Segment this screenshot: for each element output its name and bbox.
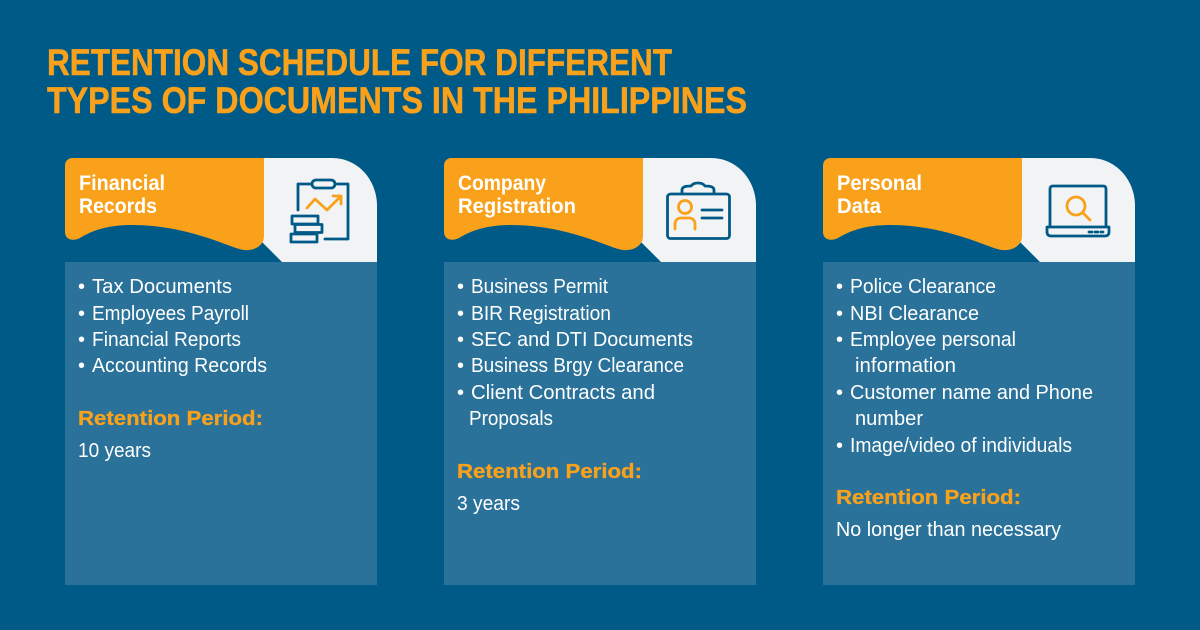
document list: BIR Registration [471, 303, 611, 325]
document list: SEC and DTI Documents [471, 329, 693, 351]
document list: • [78, 276, 85, 298]
retention period: Retention Period: [457, 461, 642, 483]
document list: Customer name and Phone [850, 382, 1093, 404]
document list: • [457, 382, 464, 404]
heading [458, 172, 576, 218]
document list: Proposals [469, 408, 553, 430]
title: RETENTION SCHEDULE FOR DIFFERENT [47, 42, 672, 83]
document list: • [78, 303, 85, 325]
header orange banner [444, 158, 643, 250]
document list: Accounting Records [92, 355, 267, 377]
document list: • [457, 276, 464, 298]
heading: Registration [458, 195, 576, 218]
document list: • [836, 382, 843, 404]
document list: • [836, 435, 843, 457]
document list: Employees Payroll [92, 303, 249, 325]
header light tab [1008, 158, 1135, 262]
panel body [444, 262, 756, 585]
document list: • [836, 303, 843, 325]
heading: Personal [837, 172, 922, 195]
retention period [457, 461, 642, 515]
panel: financial records [65, 158, 377, 585]
heading [79, 172, 165, 218]
header orange banner [65, 158, 264, 250]
document list: information [855, 355, 956, 377]
heading: Company [458, 172, 546, 195]
document list: • [457, 303, 464, 325]
retention period: Retention Period: [78, 408, 263, 430]
document list: Business Brgy Clearance [471, 355, 684, 377]
retention period [78, 408, 263, 462]
retention period [836, 487, 1061, 541]
heading [837, 172, 922, 218]
title [47, 42, 747, 121]
document list: NBI Clearance [850, 303, 979, 325]
retention period: No longer than necessary [836, 519, 1061, 541]
document list: number [855, 408, 923, 430]
panel body [823, 262, 1135, 585]
document list: • [78, 355, 85, 377]
document list: Employee personal [850, 329, 1016, 351]
title: TYPES OF DOCUMENTS IN THE PHILIPPINES [47, 80, 747, 121]
document list: Financial Reports [92, 329, 241, 351]
document list [836, 276, 1093, 457]
panel body [65, 262, 377, 585]
document list: • [457, 355, 464, 377]
icon: clipboard with chart and stacked books [291, 180, 348, 242]
icon: id badge [668, 183, 730, 238]
panel: personal data [823, 158, 1135, 585]
document list: • [78, 329, 85, 351]
header light tab [629, 158, 756, 262]
document list: Tax Documents [92, 276, 232, 298]
icon: laptop with magnifier [1047, 186, 1109, 236]
document list: Image/video of individuals [850, 435, 1072, 457]
document list [78, 276, 267, 377]
document list [457, 276, 693, 430]
retention period: 3 years [457, 493, 520, 515]
document list: Police Clearance [850, 276, 996, 298]
header light tab [250, 158, 377, 262]
document list: Business Permit [471, 276, 608, 298]
heading: Data [837, 195, 881, 218]
header orange banner [823, 158, 1022, 250]
document list: • [836, 276, 843, 298]
document list: • [457, 329, 464, 351]
document list: Client Contracts and [471, 382, 655, 404]
panel: company registration [444, 158, 756, 585]
retention period: Retention Period: [836, 487, 1021, 509]
heading: Financial [79, 172, 165, 195]
document list: • [836, 329, 843, 351]
retention period: 10 years [78, 440, 151, 462]
heading: Records [79, 195, 157, 218]
